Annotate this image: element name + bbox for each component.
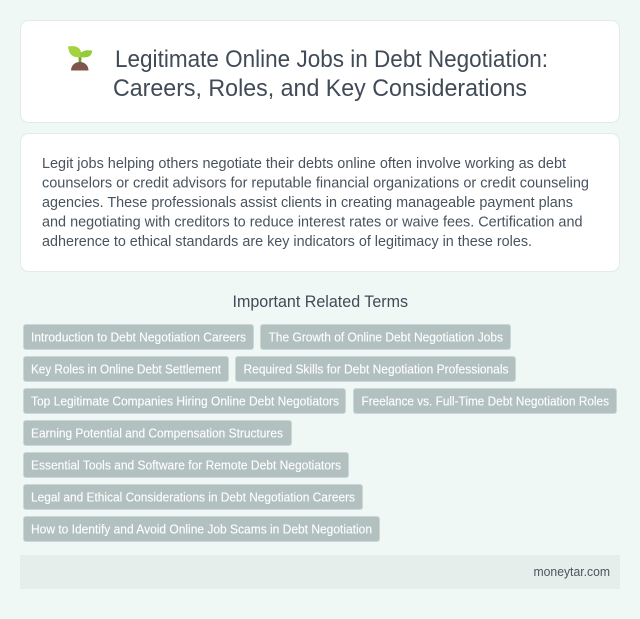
footer bar xyxy=(20,555,620,589)
tag xyxy=(24,356,228,382)
tag xyxy=(354,388,616,414)
tag xyxy=(260,324,510,350)
panel: summary text card xyxy=(20,134,620,272)
tag: Top Legitimate Companies Hiring Online Debt Negotiators xyxy=(31,394,339,408)
footer text: site name: moneytar.com xyxy=(534,564,610,579)
text block: summary paragraph: Legit jobs helping others negotiate their debts online often involve working as debt xyxy=(42,155,567,172)
tag xyxy=(24,516,380,542)
heading: important related terms: Important Related Terms xyxy=(232,293,408,311)
tag: The Growth of Online Debt Negotiation Jobs xyxy=(268,330,503,344)
tag list xyxy=(24,324,616,542)
title: Legitimate Online Jobs in Debt Negotiation: xyxy=(115,46,548,73)
tag: Freelance vs. Full-Time Debt Negotiation Roles xyxy=(362,394,609,408)
tag: How to Identify and Avoid Online Job Scams in Debt Negotiation xyxy=(31,522,372,536)
tag: Introduction to Debt Negotiation Careers xyxy=(31,330,246,344)
icon: sprout xyxy=(68,46,92,70)
tag: Earning Potential and Compensation Structures xyxy=(31,426,283,440)
title xyxy=(113,46,548,102)
tag: Required Skills for Debt Negotiation Professionals xyxy=(244,362,509,376)
text block: summary paragraph: and negotiating with creditors to reduce interest rates or waive fees. Certification and xyxy=(42,214,582,230)
text block: summary paragraph: counselors or credit advisors for reputable financial organizations or credit counseling xyxy=(42,174,589,192)
panel: title card xyxy=(20,20,620,122)
tag: Essential Tools and Software for Remote Debt Negotiators xyxy=(31,458,341,472)
tag xyxy=(24,388,346,414)
tag xyxy=(236,356,516,382)
text block: summary paragraph: agencies. These professionals assist clients in creating manageable payment plans xyxy=(42,194,573,211)
tag: Key Roles in Online Debt Settlement xyxy=(31,362,221,376)
title: Careers, Roles, and Key Considerations xyxy=(113,75,527,102)
text block: summary paragraph: adherence to ethical standards are key indicators of legitimacy in these roles. xyxy=(42,233,532,250)
text block: summary paragraph xyxy=(42,155,589,250)
tag xyxy=(24,324,254,350)
tag xyxy=(24,452,348,478)
tag xyxy=(24,484,362,510)
tag: Legal and Ethical Considerations in Debt Negotiation Careers xyxy=(31,490,355,504)
tag xyxy=(24,420,292,446)
